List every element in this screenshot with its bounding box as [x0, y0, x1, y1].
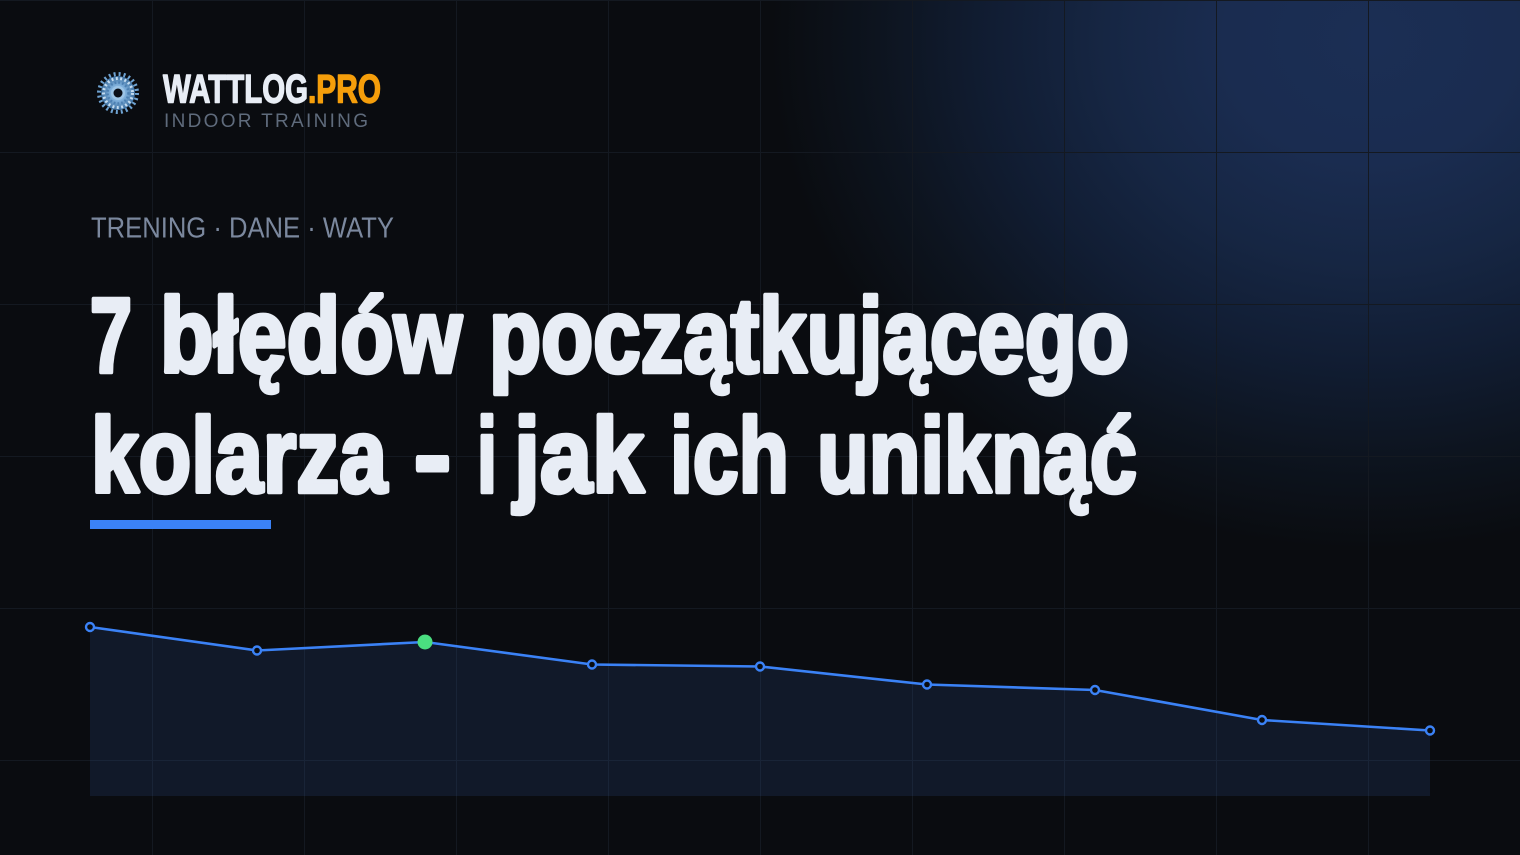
- chart points: [86, 623, 1434, 734]
- title: kolarza: [91, 397, 388, 515]
- title: błędów: [160, 277, 462, 395]
- chart line: [90, 627, 1430, 730]
- brand name: WATTLOG: [163, 68, 308, 112]
- brand name: .PRO: [308, 68, 381, 112]
- title: jak: [512, 397, 645, 515]
- logo: [99, 68, 381, 132]
- title underline: [90, 520, 271, 529]
- title: początkującego: [489, 277, 1129, 395]
- title: i: [477, 397, 497, 515]
- title: –: [416, 397, 449, 515]
- line chart: [86, 623, 1434, 796]
- title: uniknąć: [817, 397, 1137, 515]
- title: ich: [670, 397, 789, 515]
- eyebrow: TRENING · DANE · WATY: [91, 212, 394, 244]
- title: [90, 277, 1137, 515]
- chart area: [90, 627, 1430, 796]
- title: 7: [90, 277, 132, 395]
- icon: cassette gear: [99, 74, 137, 112]
- highlighted point: [418, 634, 432, 650]
- brand tagline: INDOOR TRAINING: [164, 111, 368, 132]
